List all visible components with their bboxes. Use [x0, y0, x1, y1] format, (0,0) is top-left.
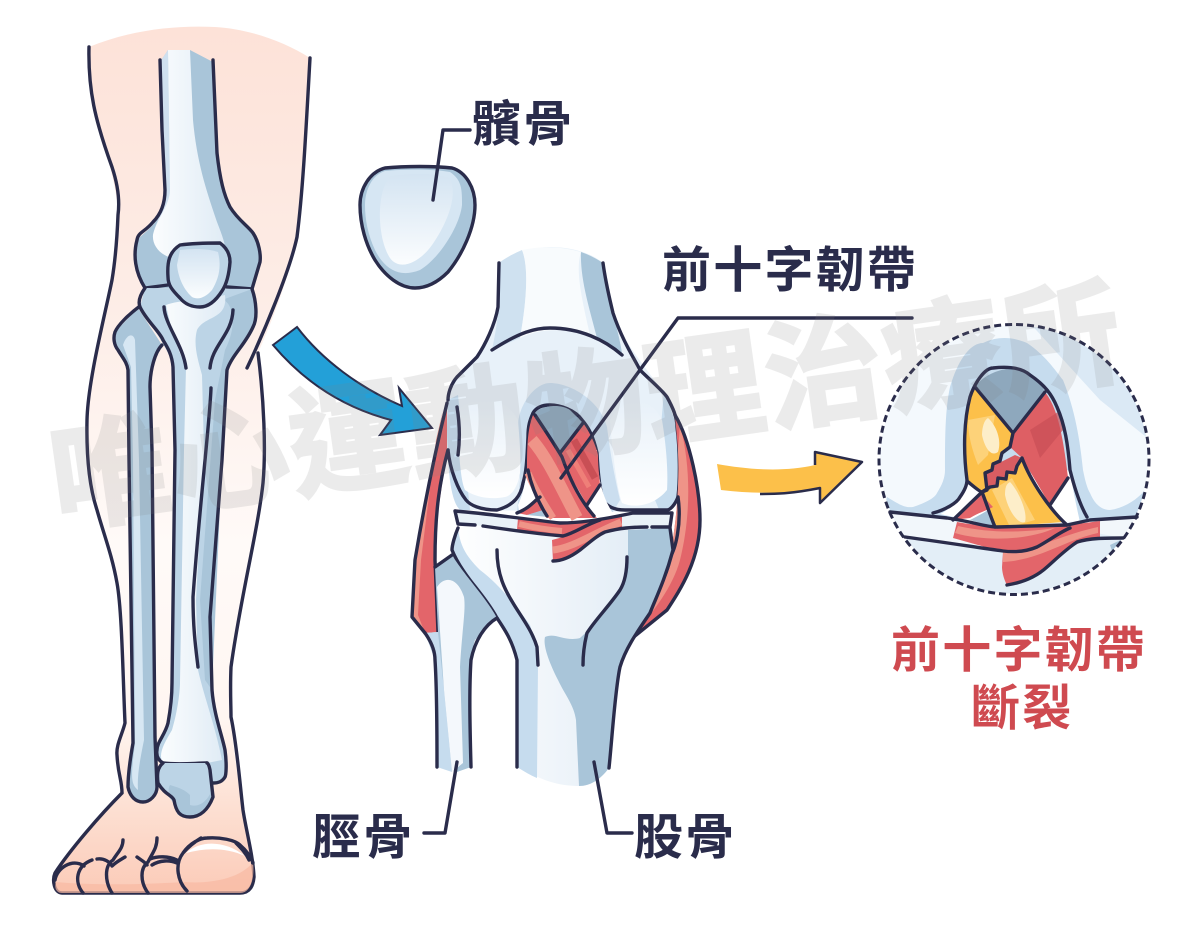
- tibia bone: [139, 288, 256, 783]
- cruciate ligaments in notch: [517, 406, 612, 518]
- halo: [880, 338, 1150, 525]
- blue arrow: [273, 327, 432, 435]
- lateral muscle left: [412, 403, 448, 633]
- label: ACL: [561, 244, 918, 478]
- skin silhouette: [54, 27, 310, 893]
- fibula bone: [114, 306, 162, 802]
- label: tibia: 股骨: [634, 811, 736, 865]
- label: ACL: 前十字韌帶: [662, 244, 918, 298]
- notch halo: [517, 383, 620, 512]
- label: ACL rupture: 斷裂: [971, 682, 1073, 736]
- lateral muscle right: [630, 415, 700, 640]
- leg skin outline: [54, 47, 310, 893]
- leg illustration: [54, 27, 310, 893]
- toes: [55, 838, 253, 893]
- label: tibia: [594, 762, 736, 865]
- label: fibula: [312, 762, 457, 865]
- condyle highlights: [458, 400, 520, 498]
- label: ACL rupture: [891, 624, 1147, 736]
- femur front: [447, 247, 679, 512]
- femur bone: [135, 50, 260, 289]
- label: fibula: 脛骨: [312, 811, 414, 865]
- patella bone small: [168, 243, 230, 307]
- patella large: [360, 166, 475, 288]
- meniscus band: [455, 511, 672, 562]
- label: ACL rupture: 前十字韌帶: [891, 624, 1147, 678]
- label: patella: 髕骨: [472, 98, 574, 152]
- band below: [892, 514, 1134, 525]
- circle magnified ruptured ligament: [879, 320, 1150, 600]
- tibia front: [452, 526, 673, 786]
- talus bone: [158, 763, 213, 817]
- knee joint illustration: [412, 247, 700, 786]
- fibula front: [425, 555, 497, 772]
- yellow arrow: [717, 452, 862, 503]
- watermark: 唯心運動物理治療所: [43, 267, 1131, 549]
- label: patella: [433, 98, 574, 200]
